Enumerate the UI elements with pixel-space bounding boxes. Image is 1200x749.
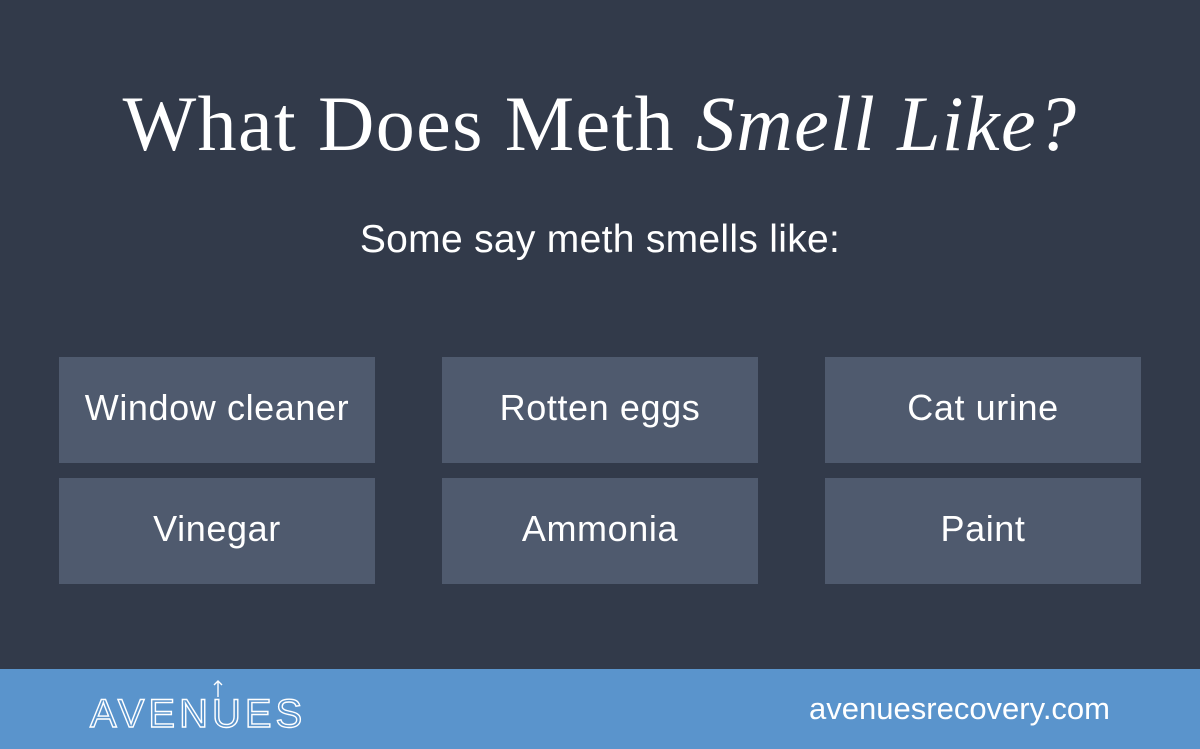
- box: window cleaner: [59, 357, 375, 463]
- box: cat urine: Cat urine: [907, 387, 1059, 428]
- footer: [0, 669, 1200, 749]
- box: ammonia: Ammonia: [522, 508, 678, 549]
- box: ammonia: [442, 478, 758, 584]
- box: rotten eggs: Rotten eggs: [500, 387, 700, 428]
- box: cat urine: [825, 357, 1141, 463]
- url: avenuesrecovery.com: [809, 691, 1110, 726]
- box: vinegar: Vinegar: [153, 508, 281, 549]
- title: What Does Meth Smell Like?: [123, 80, 1077, 167]
- box: paint: [825, 478, 1141, 584]
- subtitle: Some say meth smells like:: [360, 218, 840, 261]
- box: window cleaner: Window cleaner: [85, 387, 349, 428]
- box: paint: Paint: [940, 508, 1026, 549]
- box: rotten eggs: [442, 357, 758, 463]
- box: vinegar: [59, 478, 375, 584]
